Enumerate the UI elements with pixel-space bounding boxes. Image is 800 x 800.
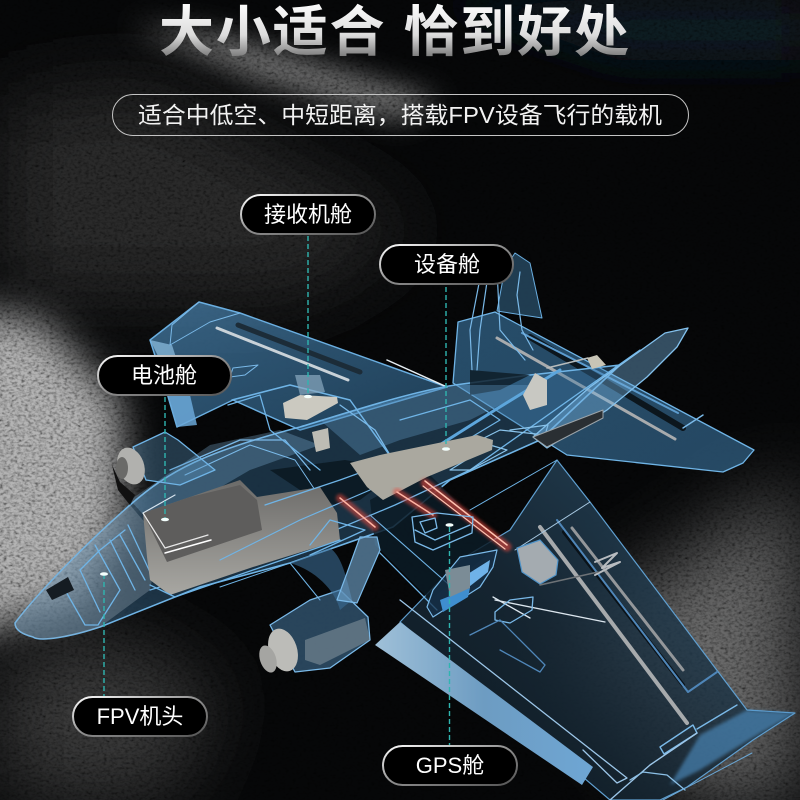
near engine [256, 537, 380, 675]
tail servo rail [533, 410, 603, 447]
label: 设备舱 [380, 245, 513, 284]
control horn [595, 553, 620, 575]
label: GPS舱 [383, 746, 517, 785]
title: 大小适合 恰到好处 [159, 1, 629, 63]
label: 接收机舱: 接收机舱 [264, 202, 352, 227]
callout anchor dots [100, 395, 454, 576]
fin upper (far vertical tail) [497, 253, 542, 318]
servo assembly under GPS [427, 550, 497, 617]
far engine [112, 432, 215, 505]
red glow tubes [340, 481, 507, 549]
label: 电池舱: 电池舱 [131, 363, 197, 388]
near vertical tail [533, 328, 688, 448]
near wing [400, 460, 795, 800]
fuselage [15, 350, 640, 639]
receiver bracket [295, 375, 325, 395]
near wing leading edge flap [375, 622, 593, 785]
small tail horn and rod [547, 355, 606, 369]
aircraft: transparent blue wireframe [15, 253, 795, 800]
GPS bay wireframe [412, 513, 473, 550]
equipment bay hatch [350, 435, 493, 500]
label: FPV机头 [73, 697, 207, 736]
gray servo on wing [517, 540, 558, 584]
rear servo [523, 373, 547, 410]
horizontal stabilizer [453, 268, 754, 472]
label: 接收机舱 [241, 195, 375, 234]
subtitle pill: 适合中低空、中短距离，搭载FPV设备飞行的载机 [138, 102, 662, 128]
small servo [312, 428, 330, 452]
label: GPS舱: GPS舱 [416, 753, 484, 778]
callout leader lines [104, 236, 450, 745]
receiver bay hatch [283, 395, 338, 420]
far wing [150, 302, 447, 430]
label: 电池舱 [98, 356, 231, 395]
battery: front bay [143, 460, 395, 597]
label: 设备舱: 设备舱 [414, 252, 480, 277]
label: FPV机头: FPV机头 [97, 704, 183, 729]
subtitle pill [112, 94, 688, 136]
